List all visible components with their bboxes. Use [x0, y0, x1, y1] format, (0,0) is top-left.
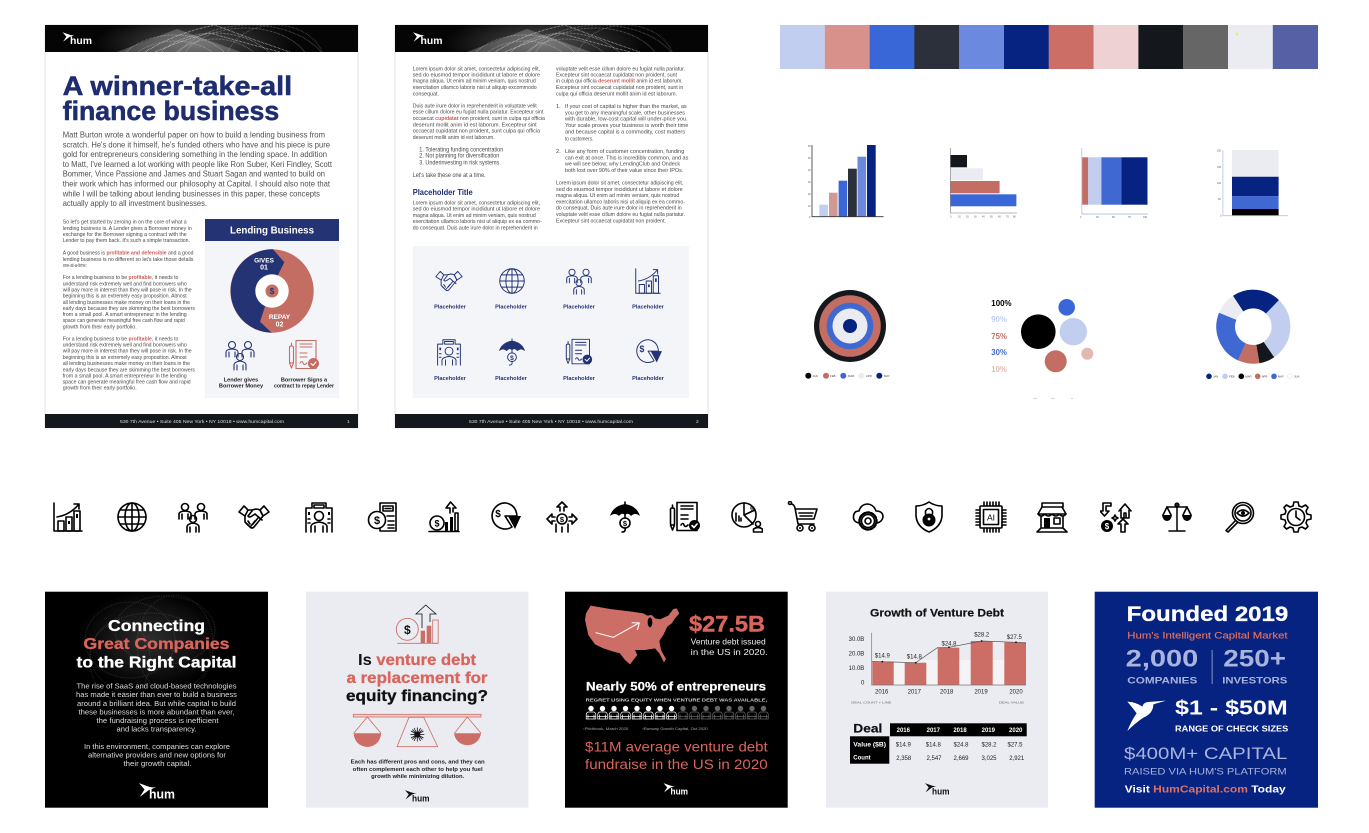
- donut cycle: gives and repay: [230, 249, 314, 333]
- left column text: sed do eiusmod tempor incididunt ut labore et dolore: [413, 72, 540, 78]
- legend: radial: JAN: [812, 374, 818, 378]
- combo chart: 10.0B: [849, 666, 864, 672]
- deal table: Count: [853, 756, 871, 762]
- pictogram: people: [586, 706, 768, 719]
- page 1 footer: 1: [347, 419, 350, 425]
- legend: radial: MAR: [848, 374, 854, 378]
- chart: horizontal bar chart: 0: [950, 216, 952, 218]
- bubble labels: [991, 299, 1012, 374]
- stat: companies: [1126, 646, 1198, 687]
- icon: hummingbird: [1127, 701, 1166, 731]
- deal table: $27.5: [1007, 742, 1023, 748]
- stat: investors: 250+: [1223, 646, 1286, 673]
- legend: radial: FEB: [830, 374, 836, 378]
- deal table: 2,547: [926, 756, 942, 762]
- chart: concentric radial: [805, 290, 890, 379]
- stat: investors: INVESTORS: [1222, 676, 1287, 687]
- chart: horizontal bar chart: 10: [958, 216, 961, 218]
- card: connecting great companies: [45, 590, 268, 808]
- combo chart: $14.9: [875, 654, 890, 660]
- left column body text: early days because they are skimming the best borrowers: [63, 306, 195, 312]
- deal table: 2018: [953, 728, 967, 734]
- page 1 footer: 530 7th Avenue • Suite 405 New York • NY 10018 • www.humcapital.com: [120, 419, 284, 425]
- map: United States: [585, 606, 679, 664]
- right column text: exercitation ullamco laboris nisi ut aliquip ex ea commo-: [556, 199, 685, 205]
- left column body text: from a small pool. A smart entrepreneur in the lending: [63, 373, 187, 379]
- title: finance business: [63, 96, 279, 126]
- logo: hum: [62, 32, 92, 47]
- combo chart: DEAL COUNT + LINE: [851, 700, 892, 704]
- label: borrower signs: Borrower Signs a: [281, 378, 328, 384]
- card 2 caption: [351, 760, 485, 780]
- logo: hum card 4: hum: [932, 786, 950, 796]
- card 1 body: has made it easier than ever to build a business: [76, 690, 237, 699]
- panel: placeholder icon grid: Placeholder: [434, 376, 467, 382]
- heading: placeholder title: Placeholder Title: [413, 188, 473, 197]
- right column text: magna aliqua. Ut enim ad minim veniam, quis nostrud: [556, 193, 679, 199]
- panel: placeholder icon grid: [413, 246, 689, 398]
- logo: hum card 2: [405, 790, 430, 804]
- legend: donut: MAY: [1278, 374, 1284, 378]
- card 1 body: these businesses is more abundant than ever,: [78, 708, 234, 716]
- chart: stacked column: 0: [1220, 214, 1222, 218]
- left column body text: beginning this is an extremely easy proposition. Almost: [63, 355, 187, 361]
- combo chart: 0: [861, 680, 865, 686]
- page 2 footer: [395, 414, 708, 428]
- left column body text: understand risk extremely well and find borrowers who: [63, 281, 187, 287]
- label: lender gives: Lender gives: [224, 378, 258, 384]
- chart: stacked horizontal bar: 100: [1143, 216, 1148, 219]
- chart: column chart: 30: [808, 181, 811, 184]
- chart: horizontal bar chart: 60: [998, 216, 1001, 218]
- stat: companies: 2,000: [1126, 646, 1198, 673]
- donut cycle: gives and repay: GIVES: [254, 258, 275, 264]
- deal table: 2016: [897, 728, 911, 734]
- left column body text: space can generate meaningful free cash flow and rapid: [63, 318, 185, 324]
- card 1 body: In this environment, companies can explore: [84, 742, 230, 751]
- stat: check sizes: [1175, 697, 1289, 733]
- stat: 11M average: fundraise in the US in 2020: [585, 756, 768, 772]
- left column text: Lorem ipsum dolor sit amet, consectetur adipiscing elit,: [413, 66, 540, 72]
- intro paragraph: to Matt, I've learned a lot working with people like Ron Suber, Keri Findley, Scott: [63, 159, 333, 169]
- lending panel heading: Lending Business: [230, 226, 314, 236]
- page 2 footer: 530 7th Avenue • Suite 405 New York • NY 10018 • www.humcapital.com: [469, 419, 633, 425]
- panel: lending business diagram: [205, 219, 339, 398]
- left column text: deserunt mollit anim id est laborum.: [413, 135, 495, 141]
- right column text: 1.: [556, 104, 561, 110]
- title: A winner-take-all: [63, 71, 292, 101]
- intro paragraph: actually apply to all investment businesses.: [63, 198, 207, 208]
- logo: hum card 2: hum: [412, 794, 430, 804]
- chart: column chart: [808, 145, 884, 219]
- deal table: 2,358: [896, 756, 912, 762]
- left column body text: growth from their early portfolio.: [63, 386, 137, 392]
- logo: hum card 4: [925, 783, 950, 796]
- left column body text: early days because they are skimming the best borrowers: [63, 367, 195, 373]
- stat caption: Venture debt issued: [691, 638, 766, 646]
- panel: placeholder icon grid: Placeholder: [632, 376, 665, 382]
- intro paragraph: Bommer, Vince Passione and James and Stuart Sagan and wanted to build on: [63, 169, 325, 179]
- panel: report page 1: [45, 13, 358, 428]
- logo: hum card 3: hum: [670, 786, 688, 796]
- logo: hum page 2: [413, 32, 442, 47]
- stat: 400M capital: [1124, 744, 1287, 777]
- chart: bubble chart: [991, 299, 1093, 398]
- chart: donut: [1206, 288, 1299, 379]
- chart: stacked column: 100: [1217, 182, 1222, 185]
- right column text: with durable, low-cost capital will under-price you.: [564, 117, 688, 123]
- left column body text: beginning this is an extremely easy proposition. Almost: [63, 294, 187, 300]
- right column text: voluptate velit esse cillum dolore eu fugiat nulla pariatur.: [556, 66, 685, 72]
- right column text: [556, 66, 688, 224]
- combo chart: [849, 632, 1026, 704]
- left column text: Let's take these one at a time.: [413, 173, 486, 179]
- panel: placeholder icon grid: Placeholder: [563, 304, 596, 310]
- stat: 11M average: [585, 739, 768, 772]
- intro paragraph: while I will be talking about lending businesses in this paper, these concepts: [62, 188, 320, 198]
- deal table: Value ($B): [853, 742, 886, 748]
- card 1 body: their growth capital.: [124, 759, 192, 768]
- left column lower text: Lorem ipsum dolor sit amet, consectetur adipiscing elit,: [413, 201, 540, 207]
- panel: placeholder icon grid: Placeholder: [632, 304, 665, 310]
- panel: placeholder icon grid: Placeholder: [563, 376, 596, 382]
- left column text: occaecat cupidatat non proident, sunt culpa qui officia: [413, 129, 541, 135]
- card 5 heading: Founded 2019: [1127, 603, 1288, 626]
- left column text: exercitation ullamco laboris nisi ut aliquip excommodo: [413, 85, 537, 91]
- right column text: Like any form of customer concentration, funding: [565, 149, 684, 155]
- logo: hum card 1: hum: [149, 786, 175, 802]
- deal table: $14.9: [896, 742, 911, 748]
- left column body text: lending business is. A Lender gives a Borrower money in: [63, 226, 192, 232]
- deal table: 2019: [982, 728, 996, 734]
- icon: dollar growth: $: [404, 623, 411, 637]
- stat: nearly 50 percent: Nearly 50% of entrepreneurs: [586, 682, 766, 694]
- right column text: sed do eiusmod tempor incididunt ut labore et dolore: [556, 187, 683, 193]
- label: borrower signs: contract to repay Lender: [274, 384, 335, 390]
- deal table: 2020: [1009, 728, 1023, 734]
- left column body text: [62, 220, 195, 392]
- card 1 body: the fundraising process is inefficient: [96, 716, 219, 725]
- card 1 heading: Great Companies: [84, 636, 230, 653]
- left column body text: from a small pool. A smart entrepreneur in the lending: [63, 312, 187, 318]
- card 1 heading: [76, 618, 236, 672]
- left column body text: one-at-a-time:: [63, 263, 87, 269]
- combo chart: 2020: [1009, 690, 1023, 696]
- left column body text: Lender to pay them back. It's such a simple transaction.: [63, 238, 190, 244]
- chart: stacked horizontal bar: 50: [1112, 216, 1115, 219]
- bubble labels: 10%: [991, 365, 1007, 374]
- card: founded 2019: [1095, 592, 1318, 808]
- right column text: Excepteur sint occaecat cupidatat non proident, sunt in: [556, 85, 683, 91]
- donut cycle: gives and repay: $: [270, 287, 275, 296]
- left column text: 1. Tolerating funding concentration: [419, 146, 504, 153]
- left column lower text: sed do eiusmod tempor incididunt ut labore et dolore: [413, 207, 540, 213]
- intro paragraph: their work which has informed our philosophy at Capital. I should also note that: [63, 178, 331, 188]
- card 1 body: alternative providers and new options for: [88, 750, 226, 760]
- chart: horizontal bar chart: [950, 148, 1017, 218]
- combo chart: 30.0B: [849, 637, 864, 643]
- deal table: 2,921: [1009, 756, 1025, 762]
- stat caption: [691, 638, 768, 657]
- chart: column chart: 50: [808, 157, 811, 160]
- legend: donut: [1206, 374, 1299, 379]
- card 1 body: [76, 682, 237, 768]
- page 2 footer: 2: [696, 419, 699, 425]
- chart: column chart: 40: [808, 169, 811, 172]
- page 1 header band: [45, 13, 358, 137]
- label: borrower signs: [274, 378, 335, 390]
- left column lower text: [413, 201, 542, 231]
- left column body text: all lending businesses make money on their loans in the: [63, 361, 190, 367]
- logo: hum page 2: hum: [420, 35, 442, 47]
- left column text: esse cillum dolore eu fugiat nulla pariatur. Excepteur sint: [413, 110, 544, 116]
- combo chart: $24.8: [941, 642, 957, 648]
- right column text: Lorem ipsum dolor sit amet, consectetur adipiscing elit,: [556, 181, 684, 187]
- combo chart: 2018: [940, 690, 954, 696]
- left column text: deserunt mollit anim id est laborum. Excepteur sint: [413, 122, 537, 128]
- label: lender gives: [219, 378, 264, 390]
- donut cycle: gives and repay: 01: [260, 264, 268, 272]
- left column text: magna aliqua. Ut enim ad minim veniam, quis nostrud: [413, 79, 536, 85]
- right column text: 2.: [556, 149, 561, 155]
- right column text: can exit at once. This is incredibly common, and as: [565, 155, 688, 161]
- intro paragraph: Matt Burton wrote a wonderful paper on how to build a lending business from: [63, 129, 325, 139]
- left column text: consequat.: [413, 91, 439, 97]
- chart: column chart: 10: [808, 205, 811, 208]
- right column text: and because capital is a commodity, cost matters: [565, 130, 685, 136]
- left column body text: A good business is profitable and defensible and a good: [63, 251, 193, 257]
- chart: stacked column: 200: [1217, 150, 1222, 152]
- legend: donut: JUN: [1294, 374, 1299, 378]
- right column text: in culpa qui officia deserunt mollit anim id est laborum.: [556, 79, 683, 85]
- right column text: Excepteur sint occaecat cupidatat non proident, sunt: [556, 72, 677, 78]
- left column body text: space can generate meaningful free cash flow and rapid: [63, 379, 191, 385]
- combo chart: 20.0B: [849, 651, 864, 657]
- left column lower text: exercitation ullamco laboris nisi ut aliquip ex ea commo-: [413, 219, 542, 225]
- right column text: to customers.: [565, 136, 594, 142]
- card 2 caption: growth while minimizing dilution.: [371, 774, 465, 780]
- left column text: 3. Underinvesting in risk systems: [419, 159, 499, 166]
- legend: donut: FEB: [1229, 374, 1235, 378]
- card 2 heading: Is venture debt: [358, 652, 476, 669]
- chart: horizontal bar chart: 30: [974, 216, 977, 218]
- left column body text: will pay more in interest than they will pose in risk. In the: [62, 349, 192, 355]
- stat: check sizes: $1 - $50M: [1175, 697, 1288, 719]
- stat subheading: REGRET USING EQUITY WHEN VENTURE DEBT WAS AVAILABLE,: [586, 697, 767, 702]
- right column text: Your scale proves your business is worth their time: [565, 123, 688, 129]
- left column body text: lending business is no different so let's take those details: [63, 257, 194, 263]
- combo chart: $27.5: [1007, 635, 1022, 641]
- stat: investors: [1222, 646, 1287, 687]
- intro paragraph: [62, 129, 333, 208]
- footnotes: [583, 727, 708, 731]
- left column body text: For a lending business to be profitable, it needs to: [63, 275, 178, 281]
- donut cycle: gives and repay: 02: [276, 322, 283, 328]
- deal table: $28.2: [981, 742, 997, 748]
- stat: 400M capital: RAISED VIA HUM'S PLATFORM: [1124, 766, 1287, 777]
- left column body text: For a lending business to be profitable, it needs to: [63, 336, 178, 342]
- chart: horizontal bar chart: 20: [966, 216, 969, 218]
- bubble labels: 90%: [991, 315, 1007, 324]
- right column text: we will see below; why LendingClub and Ondeck: [564, 162, 680, 168]
- left column body text: all lending businesses make money on their loans in the: [63, 300, 190, 306]
- combo chart: 2016: [875, 690, 889, 696]
- left column body text: exchange for the Borrower signing a contract with the: [63, 232, 187, 238]
- left column text: Duis aute irure dolor in reprehenderit in voluptate velit: [413, 104, 537, 110]
- chart: column chart: 0: [809, 216, 811, 219]
- bubble labels: 75%: [991, 332, 1007, 341]
- chart: horizontal bar chart: 80: [1013, 216, 1016, 218]
- left column text: 2. Not planning for diversification: [419, 153, 500, 160]
- deal table: Deal: [853, 722, 882, 736]
- card 1 body: around a brilliant idea. But while capital to build: [77, 699, 236, 708]
- card 2 heading: a replacement for: [346, 670, 488, 687]
- chart: stacked horizontal bar: 0: [1080, 216, 1082, 219]
- deal table: $14.8: [926, 742, 941, 748]
- footnotes: ¹Pitchbook, March 2020: [583, 727, 629, 731]
- stat: check sizes: RANGE OF CHECK SIZES: [1175, 723, 1289, 733]
- panel: report page 2: [395, 13, 708, 428]
- deal table: 2017: [927, 728, 941, 734]
- icon: lender people: [226, 342, 254, 370]
- stat: 11M average: $11M average venture debt: [585, 739, 768, 755]
- logo: hum card 3: [664, 783, 688, 796]
- panel: placeholder icon grid: Placeholder: [434, 304, 467, 310]
- deal table: [850, 722, 1027, 764]
- footnotes: ²Runway Growth Capital, Oct 2020: [642, 727, 708, 731]
- right column text: Excepteur sint occaecat cupidatat non proident.: [556, 218, 666, 224]
- chart: stacked horizontal bar: 75: [1128, 216, 1131, 219]
- left column lower text: do consequat. Duis aute irure dolor in reprehenderit in: [413, 225, 538, 231]
- card 1 body: The rise of SaaS and cloud-based technologies: [76, 682, 237, 690]
- legend: donut: JAN: [1213, 374, 1218, 378]
- legend: radial: APR: [866, 374, 872, 378]
- chart: horizontal bar chart: 50: [990, 216, 993, 218]
- right column text: do consequat. Duis aute irure dolor in reprehenderit in: [556, 206, 682, 212]
- stat: companies: COMPANIES: [1127, 676, 1197, 687]
- combo chart: $14.8: [907, 655, 922, 661]
- balance scale illustration: [353, 714, 481, 747]
- combo chart: DEAL VALUE: [999, 700, 1024, 704]
- chart: stacked column: [1217, 150, 1288, 218]
- panel: placeholder icon grid: Placeholder: [495, 376, 528, 382]
- legend: radial: [805, 373, 890, 379]
- colour palette: [780, 25, 1318, 69]
- panel: placeholder icon grid: Placeholder: [495, 304, 528, 310]
- page 2 header band: [395, 13, 708, 137]
- left column text: [413, 66, 546, 179]
- left column body text: So let's get started by zeroing in on the core of what a: [63, 220, 187, 226]
- card 1 body: and lacks transparency.: [116, 724, 196, 734]
- combo chart: $28.2: [974, 632, 990, 638]
- card: growth of venture debt: [826, 592, 1048, 808]
- right column text: both lost over 90% of their value since their IPOs.: [565, 168, 684, 174]
- stat: 400M capital: $400M+ CAPITAL: [1124, 744, 1287, 763]
- intro paragraph: gold for entrepreneurs considering something in the lending space. In addition: [63, 149, 327, 159]
- card 2 heading: [346, 652, 488, 705]
- bubble labels: 100%: [991, 299, 1012, 308]
- stat: 27.5B: $27.5B: [689, 612, 765, 637]
- donut cycle: gives and repay: REPAY: [269, 314, 291, 321]
- legend: donut: APR: [1262, 374, 1267, 378]
- card 2 heading: equity financing?: [346, 688, 488, 705]
- icon row: [54, 502, 1311, 532]
- left column body text: understand risk extremely well and find borrowers who: [63, 343, 187, 349]
- right column text: culpa qui officia deserunt mollit anim id est laborum.: [556, 91, 677, 97]
- card 1 heading: Connecting: [108, 618, 205, 635]
- chart: horizontal bar chart: 40: [982, 216, 985, 218]
- deal table: $24.8: [953, 742, 969, 748]
- page 1 footer: [45, 414, 358, 428]
- legend: radial: MAY: [884, 374, 890, 378]
- icon: dollar growth: [396, 605, 438, 643]
- chart: column chart: 20: [808, 193, 811, 196]
- chart: stacked column: 150: [1217, 166, 1222, 169]
- legend: donut: MAR: [1245, 374, 1252, 378]
- logo: hum: hum: [70, 35, 92, 47]
- deal table: 3,025: [981, 756, 997, 762]
- icon: contract: [290, 340, 319, 369]
- chart: column chart: 60: [808, 145, 811, 148]
- bubble labels: 30%: [991, 348, 1007, 357]
- combo chart: 2017: [908, 690, 922, 696]
- intro paragraph: scratch. He's done it himself, he's funded others who have and his piece is pure: [63, 139, 330, 149]
- left column text: occaecat cupidatat non proident, sunt in culpa qui officia: [413, 116, 546, 122]
- card 5 subheading: Hum's Intelligent Capital Market: [1127, 630, 1288, 640]
- card 2 caption: often complement each other to help you fuel: [353, 767, 483, 773]
- card: venture debt statistics: [565, 592, 788, 808]
- card: is venture debt: [306, 592, 528, 808]
- chart: stacked horizontal bar: [1080, 148, 1148, 219]
- chart: horizontal bar chart: 70: [1006, 216, 1009, 218]
- label: lender gives: Borrower Money: [219, 384, 264, 390]
- right column text: you get to any meaningful scale, other businesses: [565, 110, 685, 116]
- stat caption: in the US in 2020.: [691, 648, 768, 657]
- deal table: 2,669: [953, 756, 969, 762]
- card 2 caption: Each has different pros and cons, and they can: [351, 760, 485, 766]
- chart: stacked horizontal bar: 25: [1096, 216, 1099, 219]
- right column text: If your cost of capital is higher than the market, as: [565, 104, 687, 110]
- call to action: Visit HumCapital.com Today: [1125, 784, 1286, 796]
- combo chart: 2019: [974, 690, 988, 696]
- left column body text: will pay more in interest than they will pose in risk. In the: [62, 288, 192, 294]
- card 1 heading: to the Right Capital: [76, 654, 236, 672]
- left column body text: growth from their early portfolio.: [63, 324, 137, 330]
- left column lower text: magna aliqua. Ut enim ad minim veniam, quis nostrud: [413, 213, 536, 219]
- card 4 heading: Growth of Venture Debt: [870, 608, 1004, 620]
- title: [63, 71, 292, 126]
- logo: hum card 1: [139, 783, 175, 802]
- chart: stacked column: 50: [1218, 198, 1221, 201]
- right column text: voluptate velit esse cillum dolore eu fugiat nulla pariatur.: [556, 212, 685, 218]
